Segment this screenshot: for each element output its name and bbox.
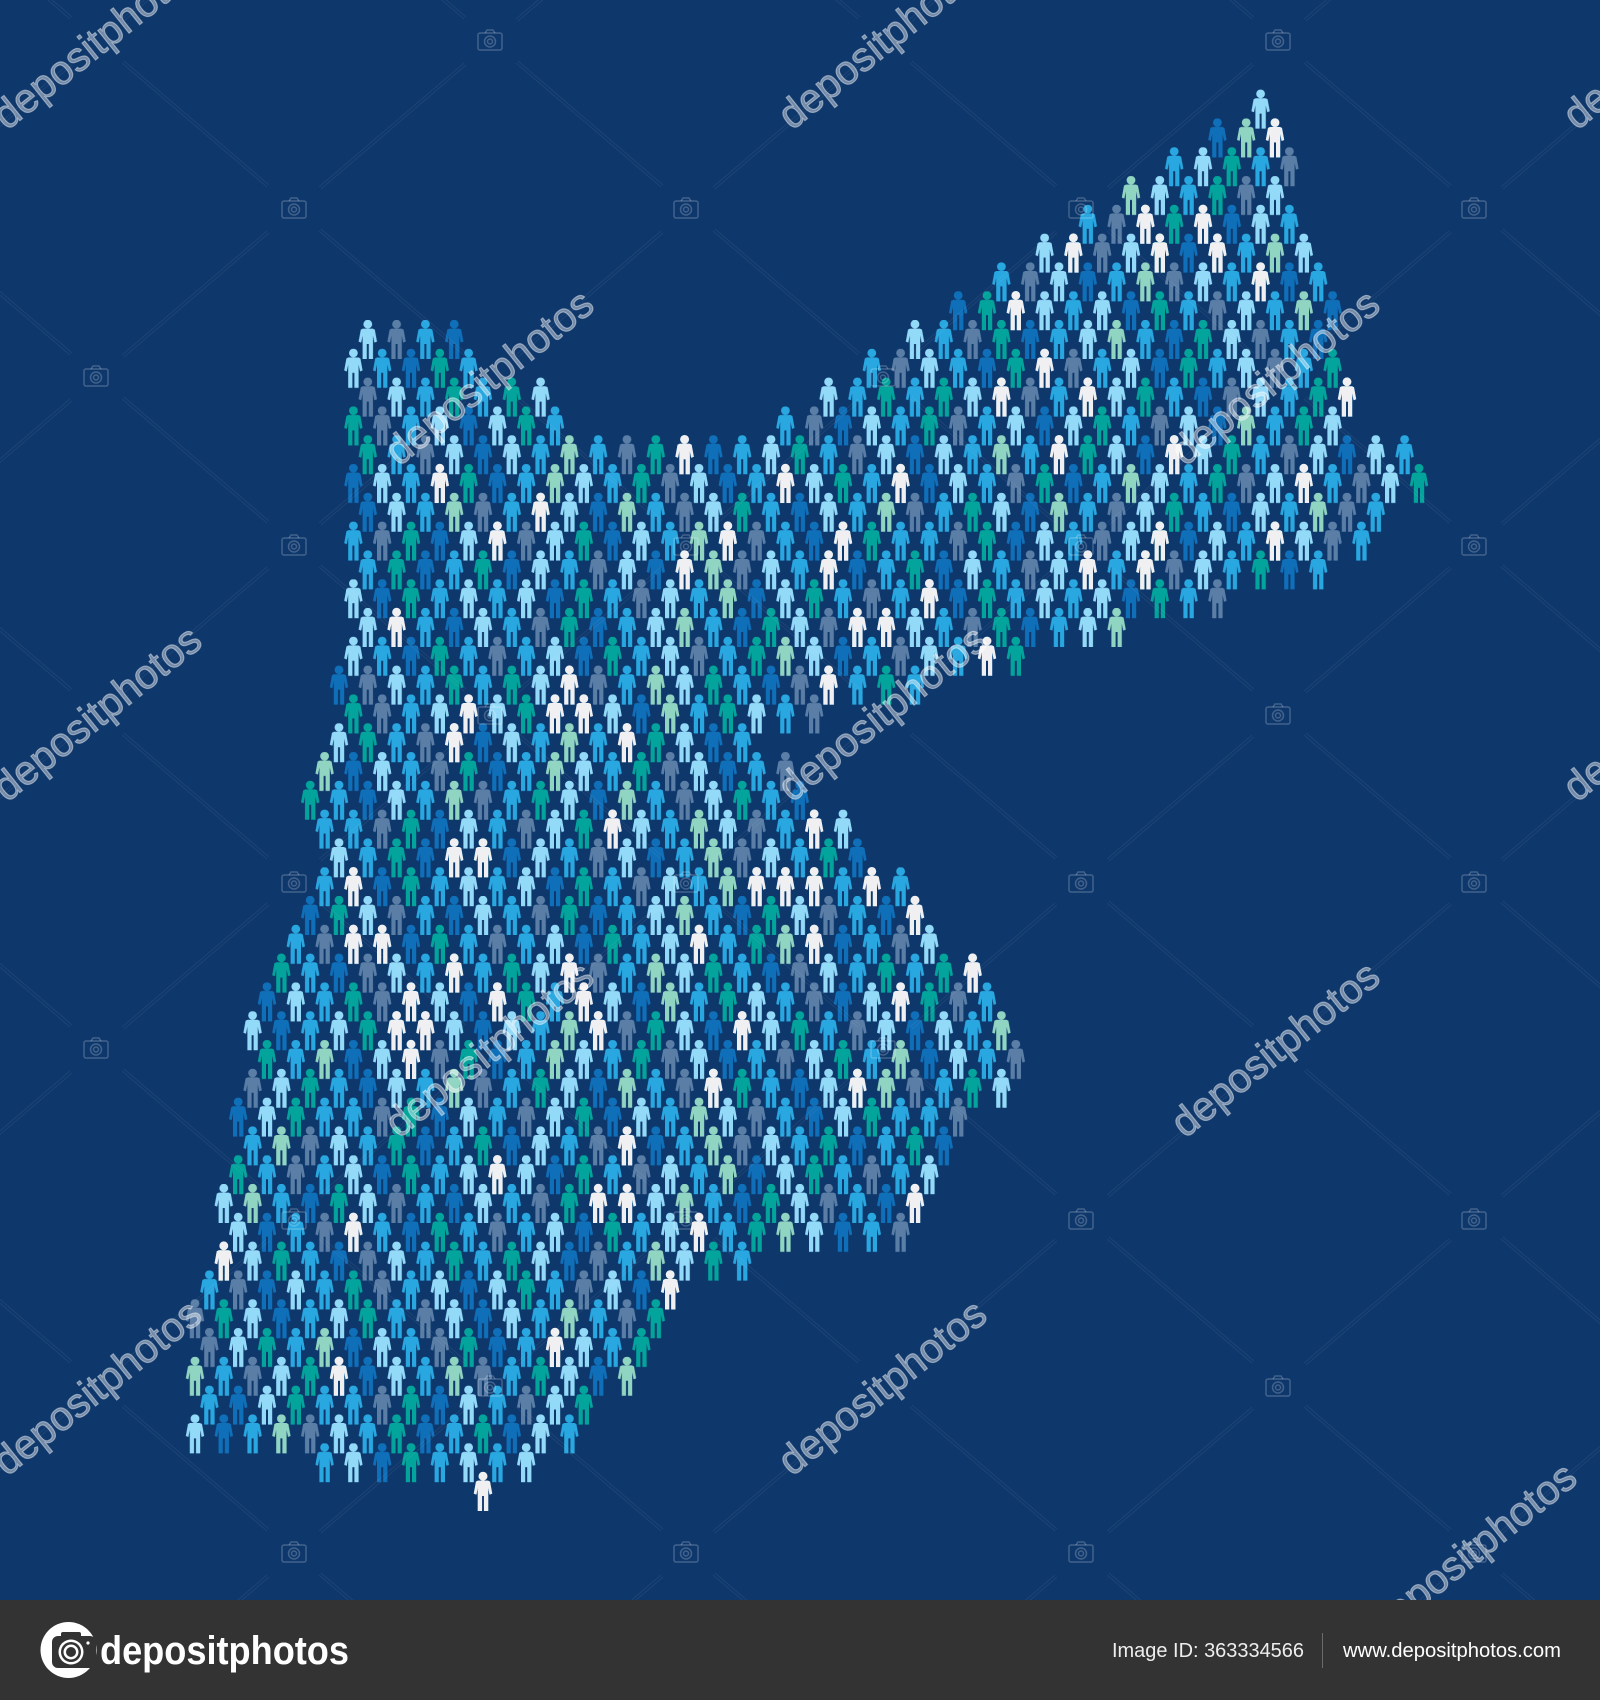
diagonal depositphotos watermarks: depositphotos [376,280,602,474]
figures: even rows [181,90,1419,1512]
diagonal depositphotos watermarks: depositphotos [1162,280,1388,474]
website url: www.depositphotos.com [1342,1639,1561,1662]
figures: odd rows [195,118,1433,1483]
highlighted white figures [215,118,1356,1511]
footer bar [0,1600,1600,1700]
watermark camera icons [84,30,1486,1562]
icon: depositphotos camera logo [40,1622,96,1678]
diagonal depositphotos watermarks: depositphotos [1162,952,1388,1146]
map: Jordan made of people figures [181,90,1433,1512]
diagonal depositphotos watermarks: depositphotos [1359,1453,1585,1647]
diagonal depositphotos watermarks: depositphotos [376,952,602,1146]
logo wordmark: depositphotos [100,1629,349,1673]
diagonal depositphotos watermarks: depositphotos [769,1290,995,1484]
diagonal depositphotos watermarks: depositphotos [769,616,995,810]
image id: Image ID: 363334566 [1112,1639,1304,1662]
